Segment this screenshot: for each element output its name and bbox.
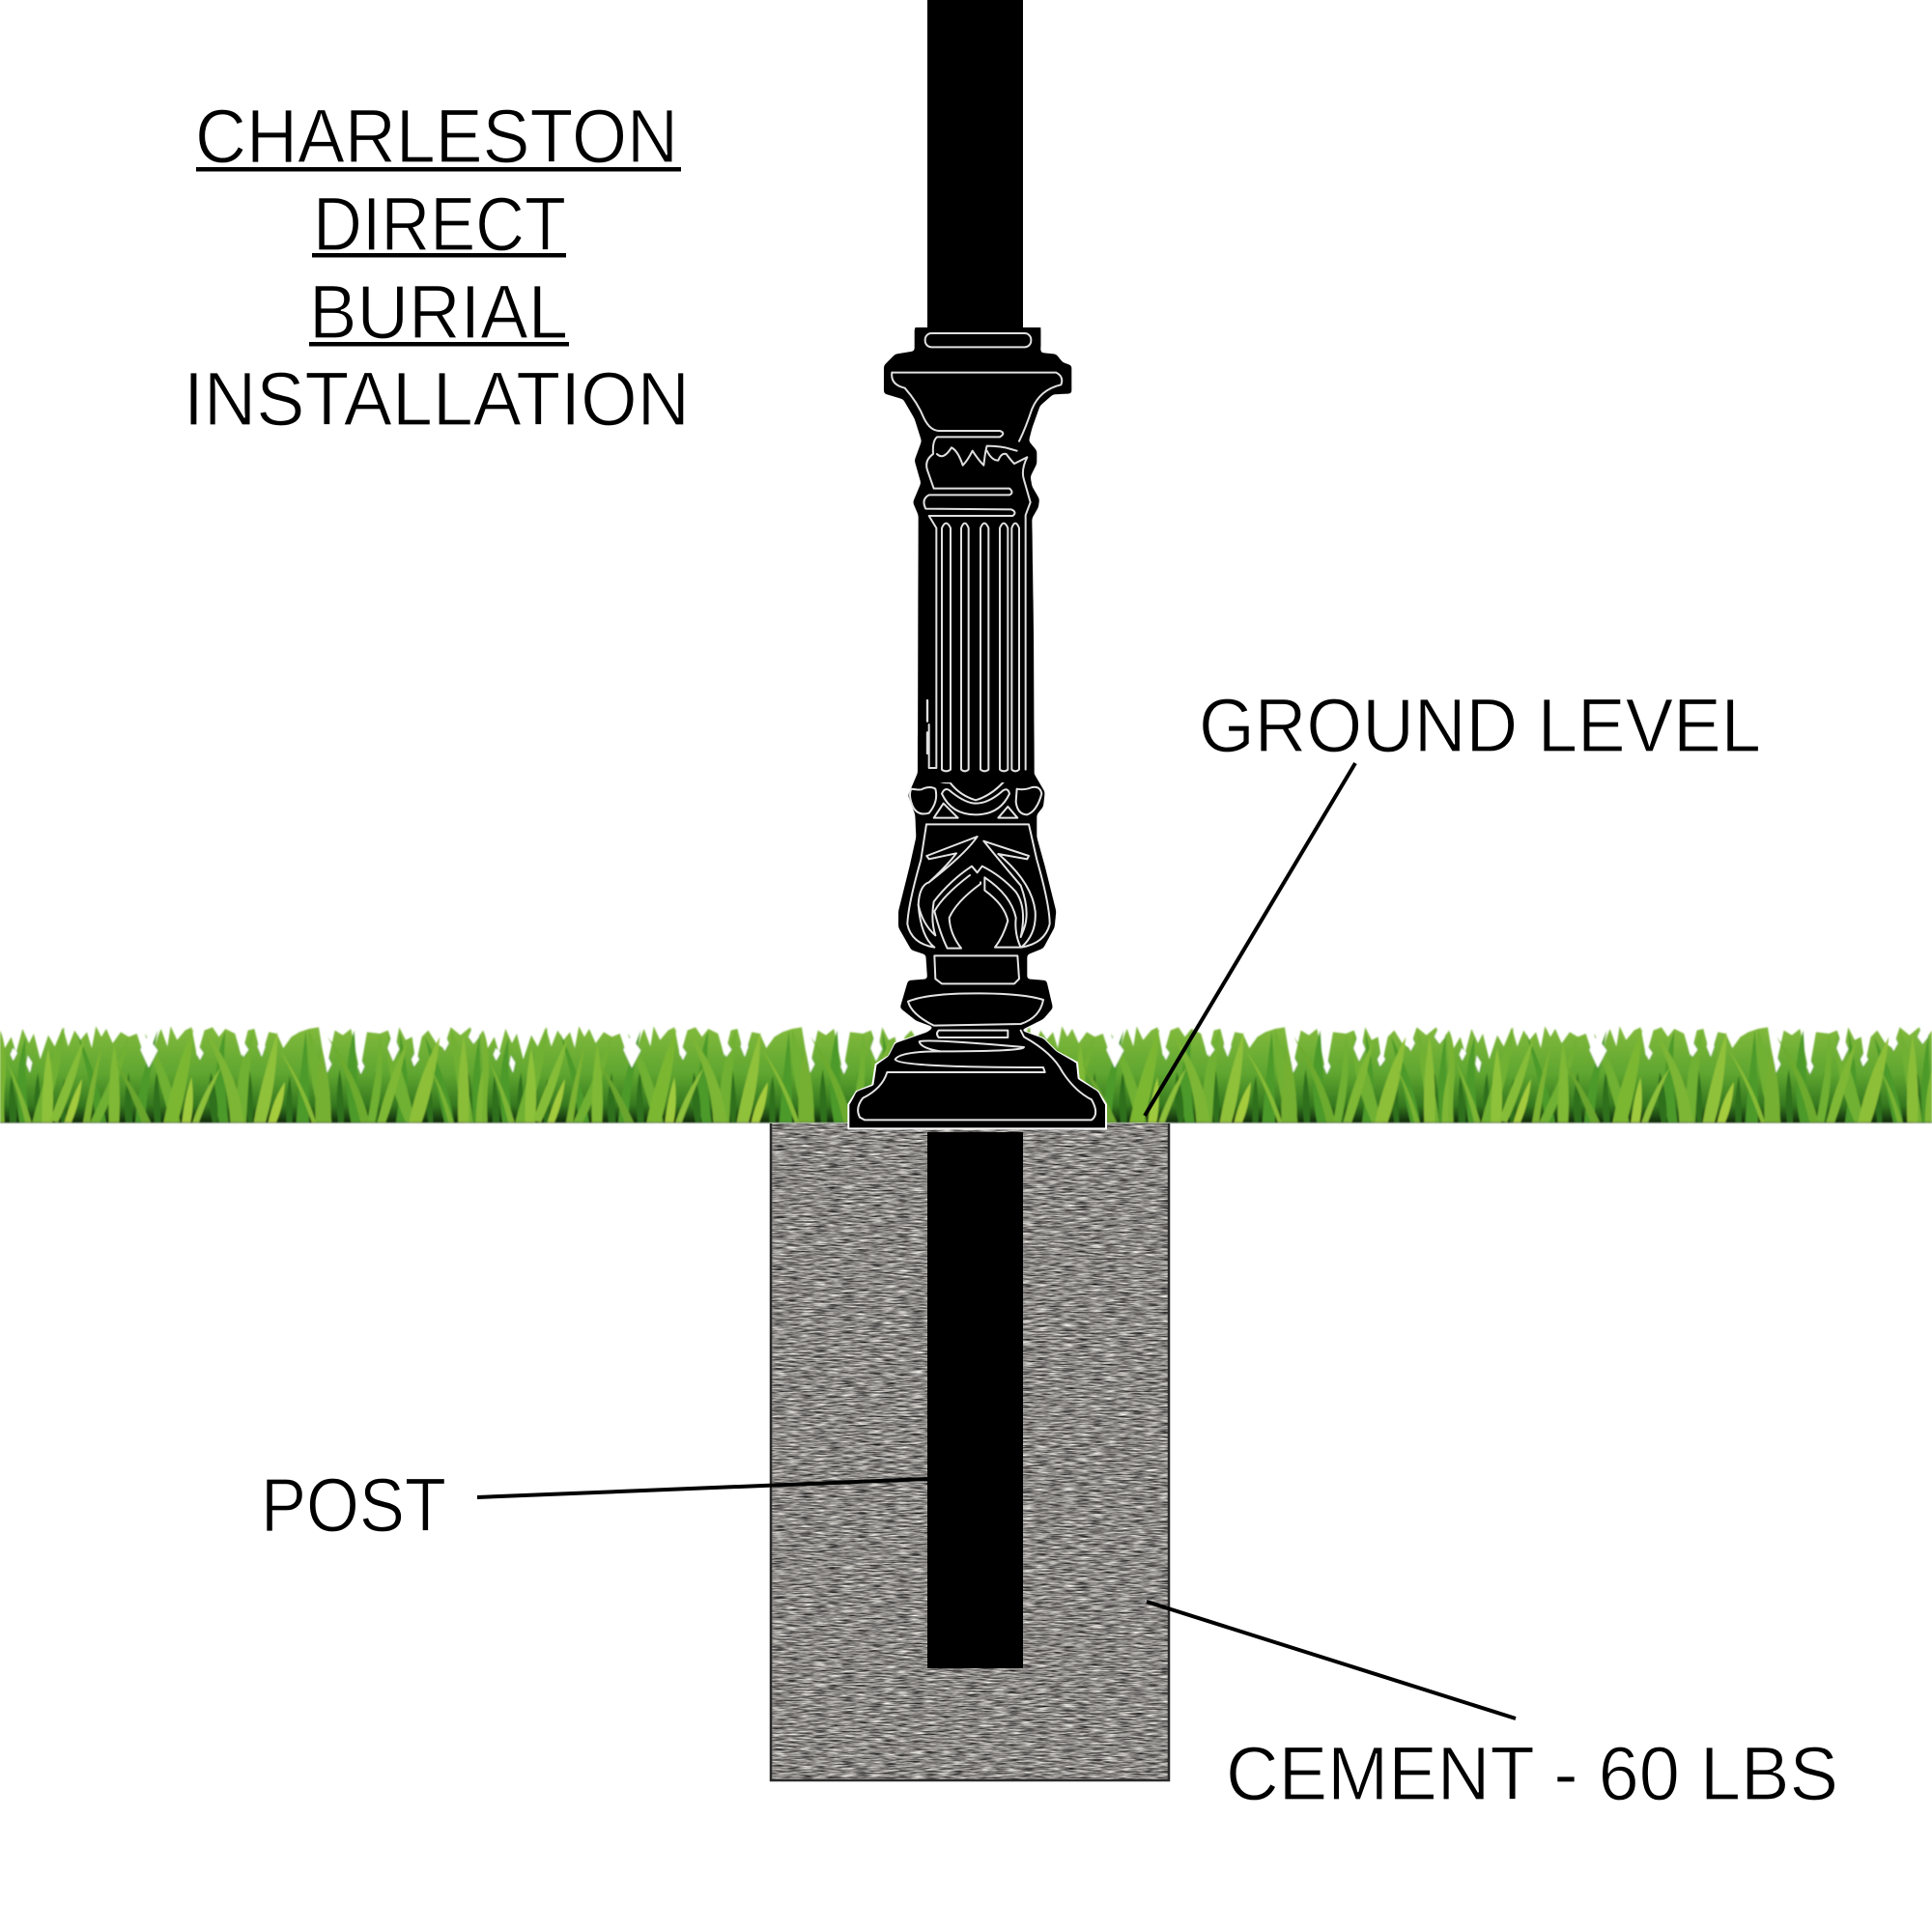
- callout: post: POST: [261, 1462, 446, 1548]
- title: DIRECT: [313, 181, 566, 267]
- grass strip: [0, 1026, 1932, 1122]
- post below ground: [927, 1132, 1023, 1668]
- callout: ground level: [1145, 682, 1761, 1116]
- title: CHARLESTON: [195, 93, 678, 179]
- title: [184, 93, 690, 441]
- callout: cement: CEMENT - 60 LBS: [1226, 1730, 1838, 1816]
- decorative cast base: fluted column and capital: [884, 327, 1071, 782]
- callout: cement: [1147, 1602, 1838, 1816]
- title: BURIAL: [309, 269, 568, 355]
- cement footing: [771, 1123, 1169, 1780]
- title: INSTALLATION: [184, 355, 690, 441]
- callout: post: [261, 1462, 928, 1548]
- decorative cast base: lower section: [848, 734, 1106, 1128]
- post above ground: [927, 0, 1023, 328]
- callout: ground level: GROUND LEVEL: [1199, 682, 1761, 768]
